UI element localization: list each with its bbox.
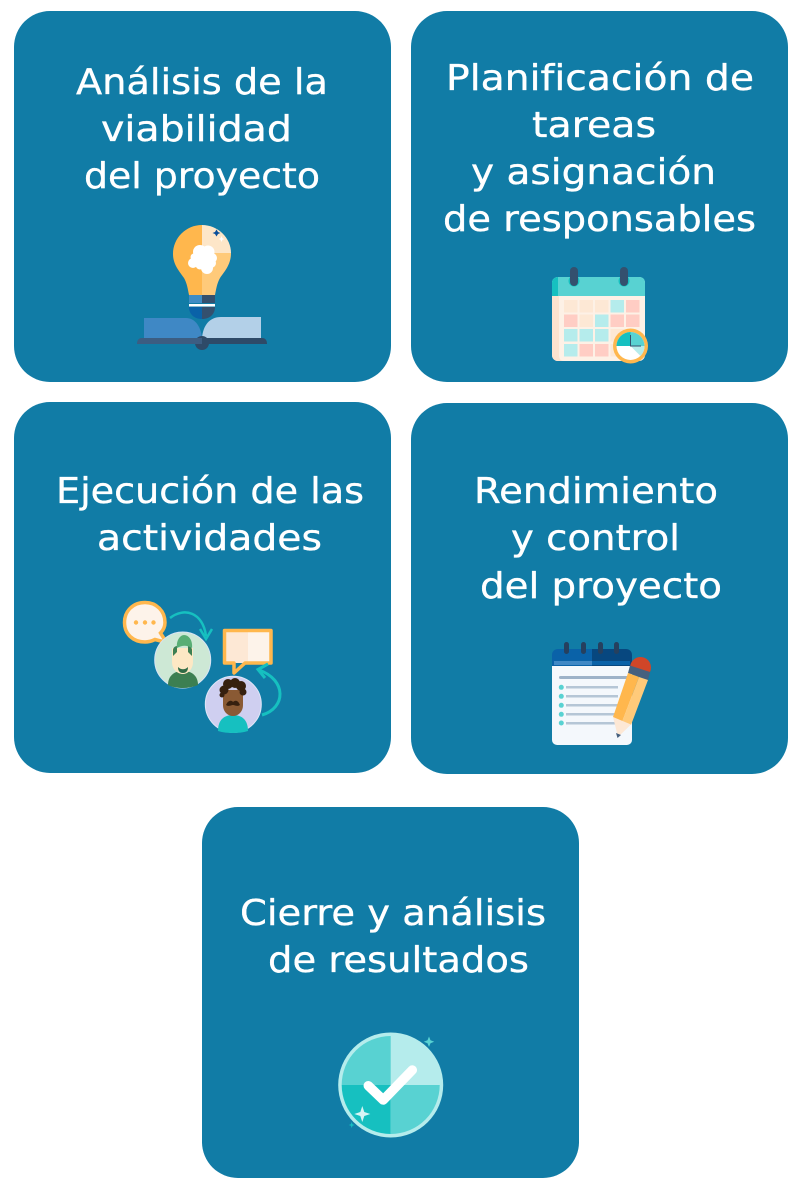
heading: ejecución	[56, 471, 364, 559]
heading: rendimiento	[474, 471, 722, 607]
panel: planificación de tareas	[411, 11, 788, 382]
heading: planificación: Planificación de	[446, 58, 754, 99]
icon: light bulb on book	[137, 225, 267, 350]
heading: rendimiento: del proyecto	[480, 566, 722, 607]
heading: análisis: del proyecto	[84, 156, 320, 197]
heading: ejecución: Ejecución de las	[56, 471, 364, 512]
heading: ejecución: actividades	[97, 518, 322, 559]
heading: planificación: y asignación	[471, 152, 716, 193]
heading: planificación	[443, 58, 756, 240]
heading: cierre: Cierre y análisis	[240, 893, 546, 934]
heading: planificación: de responsables	[443, 199, 756, 240]
heading: rendimiento: Rendimiento	[474, 471, 718, 512]
heading: análisis: Análisis de la	[76, 62, 328, 103]
heading: rendimiento: y control	[511, 518, 680, 559]
heading: análisis: viabilidad	[101, 109, 292, 150]
heading: análisis	[76, 62, 328, 197]
panel: rendimiento y control	[411, 403, 788, 774]
icon: notepad and pencil	[552, 642, 651, 745]
panel: cierre y análisis	[202, 807, 579, 1178]
icon: calendar with clock	[552, 267, 648, 364]
heading: planificación: tareas	[532, 105, 656, 146]
heading: cierre	[240, 893, 546, 981]
icon: two people talking	[124, 602, 280, 733]
panel: ejecución de las actividades	[14, 402, 391, 773]
icon: check mark badge	[338, 1032, 443, 1138]
panel: análisis de la viabilidad	[14, 11, 391, 382]
heading: cierre: de resultados	[268, 940, 529, 981]
